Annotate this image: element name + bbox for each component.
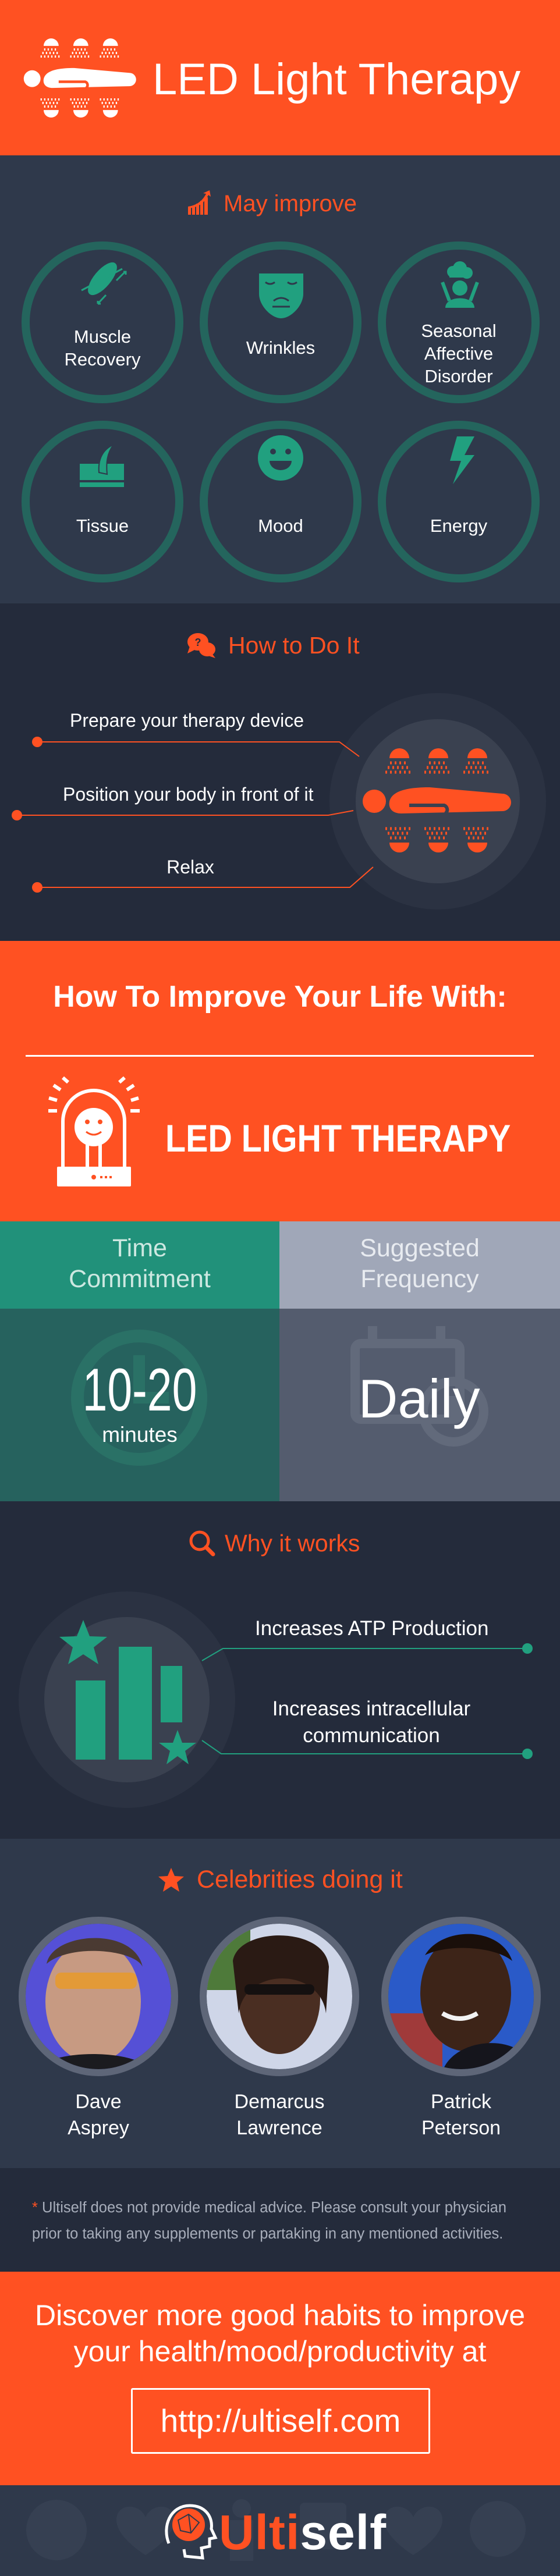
label: muscle recovery (65, 326, 141, 369)
step 1: Prepare your therapy device (70, 710, 304, 731)
panel: suggested frequency (279, 1221, 560, 1501)
heading: celebrities: Celebrities doing it (197, 1866, 403, 1893)
CTA text: Discover more good habits to improve (35, 2299, 525, 2332)
icon: wrinkles mask (259, 273, 303, 318)
label: seasonal affective disorder: Seasonal (421, 321, 497, 341)
header: time commitment: Commitment (69, 1265, 211, 1293)
heading: LED light therapy: LED LIGHT THERAPY (165, 1117, 511, 1160)
photo: Patrick Peterson (384, 1920, 536, 2072)
label: mood: Mood (258, 516, 303, 536)
circles grid (22, 241, 540, 582)
name: Dave Asprey: Dave (75, 2091, 122, 2113)
icon: clock with value (71, 1330, 207, 1466)
label: seasonal affective disorder: Affective (424, 343, 493, 364)
illustration: person under LED lamps (12, 719, 520, 893)
panel: time commitment (0, 1221, 279, 1501)
icon: alarm lamp (48, 1078, 140, 1169)
header banner (0, 0, 560, 155)
heading: may improve: May improve (224, 191, 357, 216)
title: LED Light Therapy (153, 55, 520, 104)
heading: how to do it: ? (194, 637, 201, 648)
logo: Ultiself: Ultiself (219, 2505, 387, 2560)
photo: Dave Asprey (23, 1920, 175, 2072)
icon: seasonal affective disorder (442, 261, 477, 308)
chart icon (44, 1617, 533, 1782)
heading: How To Improve Your Life With: (53, 980, 507, 1014)
name: Demarcus Lawrence: Demarcus (235, 2091, 324, 2113)
photos (19, 1917, 541, 2076)
header: suggested frequency: Suggested (360, 1234, 480, 1262)
icon: calendar (350, 1326, 488, 1447)
text: ATP: Increases ATP Production (255, 1617, 488, 1640)
heading: how to do it: How to Do It (228, 632, 360, 659)
button: url (131, 2388, 430, 2454)
header: suggested frequency: Frequency (360, 1265, 479, 1293)
disclaimer (0, 2168, 560, 2272)
name: Patrick Peterson (421, 2091, 501, 2139)
disclaimer: prior to taking any supplements or partaking in any mentioned activities. (32, 2226, 503, 2242)
photo: Demarcus Lawrence (204, 1920, 355, 2072)
panel: how to improve your life (0, 941, 560, 1221)
name: Demarcus Lawrence (235, 2091, 324, 2139)
header: time commitment (0, 1221, 279, 1309)
name: Dave Asprey (68, 2091, 129, 2139)
button: url: http://ultiself.com (161, 2403, 400, 2439)
panel: time commitment: minutes (102, 1423, 178, 1447)
icon: person under LED lamps (23, 38, 136, 118)
label: seasonal affective disorder (421, 321, 497, 386)
CTA text: your health/mood/productivity at (74, 2335, 486, 2368)
name: Dave Asprey: Asprey (68, 2117, 129, 2139)
name: Patrick Peterson: Peterson (421, 2117, 501, 2139)
step 3: Relax (166, 857, 214, 877)
label: seasonal affective disorder: Disorder (424, 366, 493, 386)
panel: how to do it (0, 603, 560, 941)
panel: time commitment: 10-20 (83, 1356, 197, 1424)
panel: celebrities (19, 1868, 541, 2138)
header: time commitment: Time (112, 1234, 167, 1262)
icon: tissue (80, 445, 124, 487)
CTA text (35, 2299, 525, 2368)
label: wrinkles: Wrinkles (246, 337, 315, 358)
label: tissue: Tissue (76, 516, 129, 536)
label: muscle recovery: Recovery (65, 349, 140, 369)
icon: energy (450, 436, 474, 484)
step 2: Position your body in front of it (63, 784, 313, 805)
text: intracellular: Increases intracellular (272, 1697, 470, 1720)
icon: mood (258, 435, 303, 481)
name: Patrick Peterson: Patrick (431, 2091, 491, 2113)
panel: why it works (0, 1501, 560, 1839)
panel: suggested frequency: Daily (359, 1368, 480, 1429)
name: Demarcus Lawrence: Lawrence (236, 2117, 322, 2139)
icon: muscle (81, 258, 126, 304)
footer (0, 2485, 560, 2576)
disclaimer: * Ultiself does not provide medical advice. Please consult your physician (32, 2200, 506, 2216)
call to action (0, 2272, 560, 2485)
panel: may improve (0, 155, 560, 603)
label: energy: Energy (430, 516, 487, 536)
text: intracellular (272, 1697, 470, 1747)
text: intracellular: communication (303, 1724, 440, 1747)
heading: why it works: Why it works (225, 1530, 360, 1557)
header: suggested frequency (279, 1221, 560, 1309)
label: muscle recovery: Muscle (74, 326, 131, 347)
